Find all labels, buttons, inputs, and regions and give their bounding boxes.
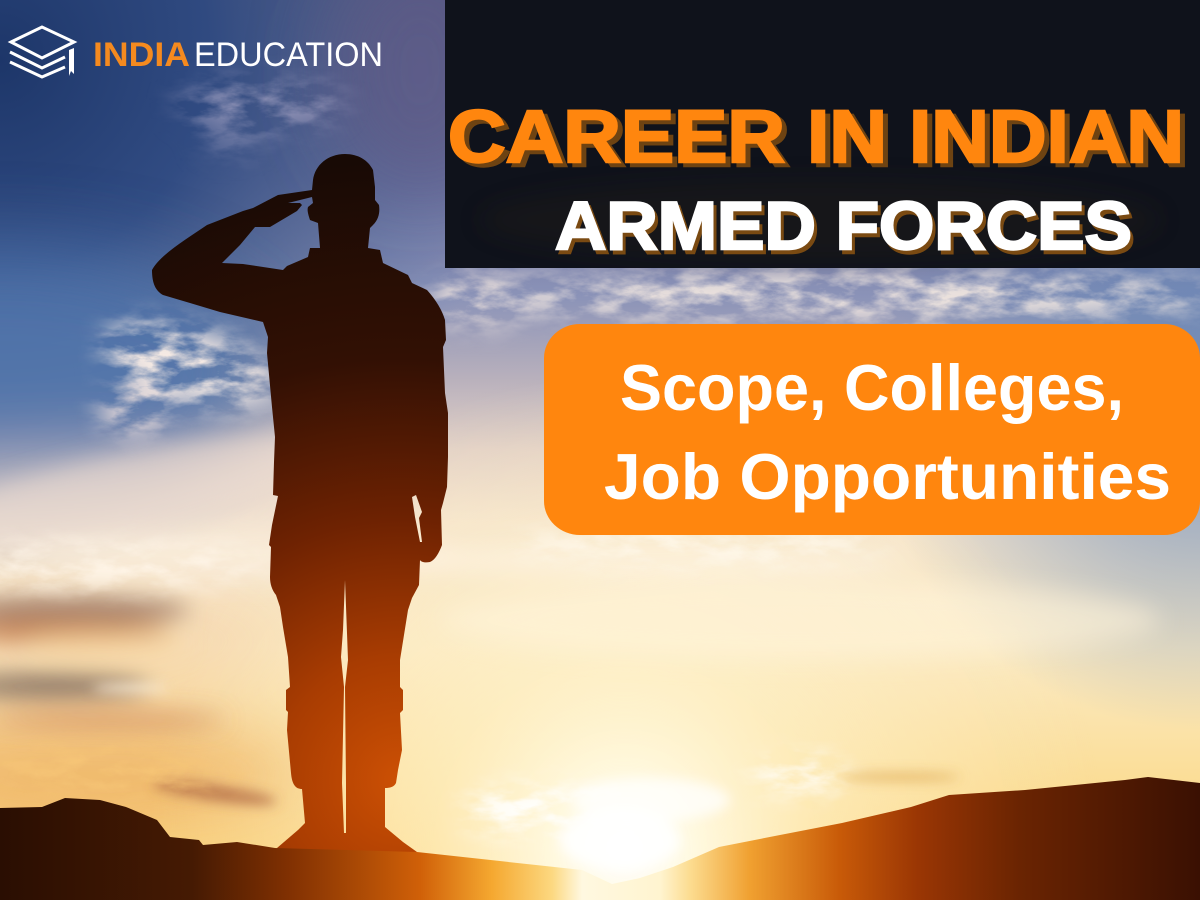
- logo: India Education: [10, 27, 383, 77]
- silhouette: saluting soldier: [152, 154, 448, 860]
- heading: career in indian: CAREER IN INDIAN: [453, 99, 1189, 182]
- panel: title: [445, 0, 1200, 268]
- subtitle line two: Job Opportunities: [604, 440, 1171, 513]
- icon: graduation cap and books: [10, 27, 74, 77]
- wordmark: EDUCATION: [194, 36, 383, 74]
- subtitle line one: Scope, Colleges,: [620, 351, 1124, 424]
- callout: scope, colleges, job opportunities: [544, 324, 1200, 535]
- heading: career in indian: CAREER IN INDIAN: [448, 95, 1184, 178]
- foreground: hills: [0, 777, 1200, 900]
- wordmark: INDIA: [93, 36, 190, 74]
- heading: armed forces: ARMED FORCES: [558, 192, 1135, 268]
- heading: armed forces: ARMED FORCES: [555, 188, 1132, 264]
